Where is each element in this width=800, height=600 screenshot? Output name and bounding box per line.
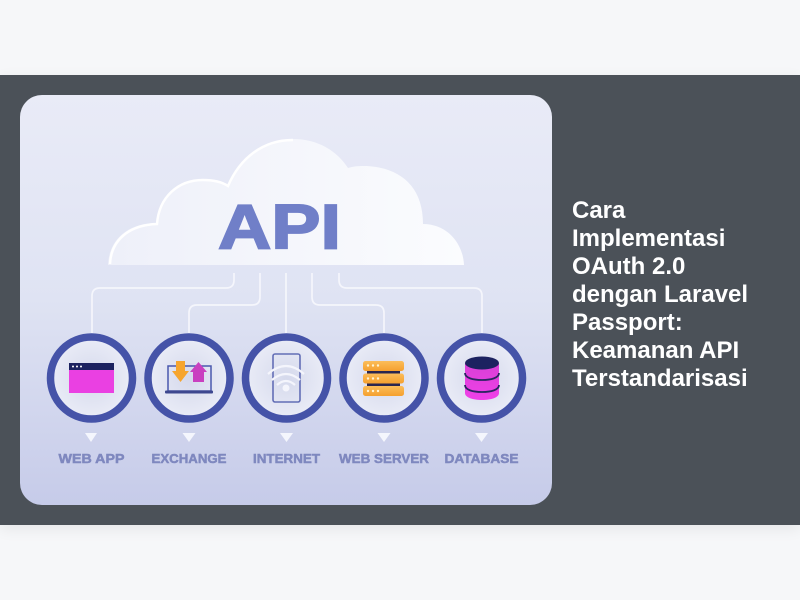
article title: OAuth 2.0 [572, 253, 685, 280]
pointer triangles [85, 433, 488, 442]
node labels: WEB SERVER [339, 451, 430, 466]
node: web app [50, 337, 132, 419]
article title: Terstandarisasi [572, 365, 748, 392]
icon: laptop with arrows [165, 361, 213, 394]
node: database [440, 337, 522, 419]
article title: Cara [572, 197, 625, 224]
connector lines [92, 273, 482, 333]
cloud with API text: API [218, 192, 341, 262]
node labels: DATABASE [444, 451, 519, 466]
icon: phone with wifi [268, 354, 304, 402]
node labels: WEB APP [58, 451, 125, 466]
article title [572, 197, 748, 392]
node: exchange [148, 337, 230, 419]
icon: server stack [363, 361, 404, 396]
panel: dark banner [0, 75, 800, 525]
node labels [58, 451, 519, 466]
article title: Keamanan API [572, 337, 739, 364]
icon: browser window [69, 363, 114, 393]
article title: Implementasi [572, 225, 725, 252]
illustration card: API diagram [20, 95, 552, 505]
cloud with API text [108, 139, 464, 265]
article title: dengan Laravel [572, 281, 748, 308]
article title: Passport: [572, 309, 683, 336]
node labels: INTERNET [253, 451, 320, 466]
icon: database cylinder [465, 356, 499, 400]
node: internet [246, 337, 328, 419]
node: web server [343, 337, 425, 419]
node labels: EXCHANGE [152, 451, 227, 466]
